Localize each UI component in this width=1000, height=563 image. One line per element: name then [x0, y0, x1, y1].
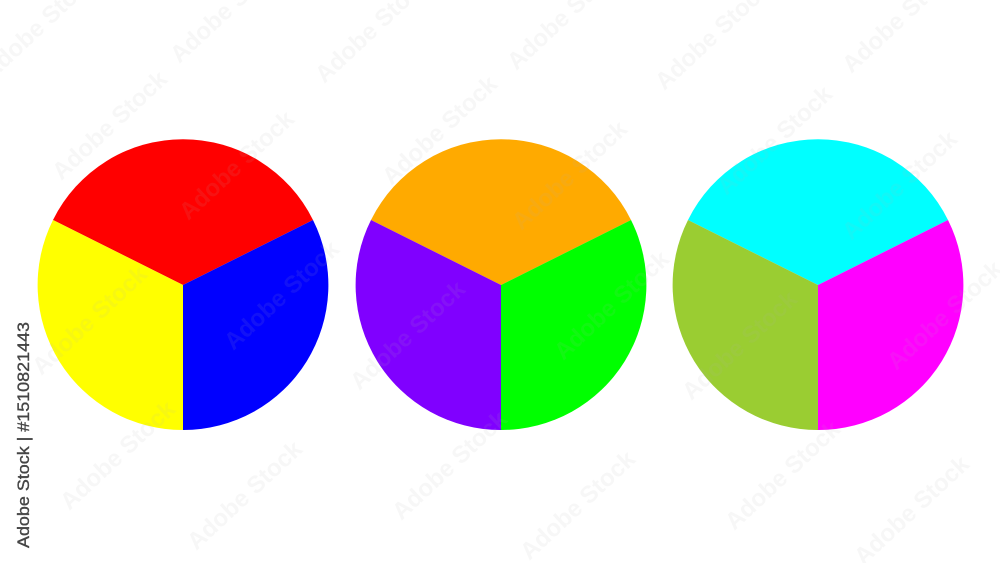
watermark pattern: Adobe Stock: [55, 395, 181, 515]
watermark pattern: Adobe Stock: [507, 115, 633, 235]
watermark pattern: Adobe Stock: [345, 275, 471, 395]
watermark pattern: Adobe Stock: [387, 405, 513, 525]
watermark pattern: Adobe Stock: [720, 415, 846, 535]
watermark pattern: Adobe Stock: [27, 260, 153, 380]
watermark pattern: Adobe Stock: [677, 285, 803, 405]
watermark pattern: Adobe Stock: [182, 435, 308, 555]
watermark pattern: Adobe Stock: [712, 80, 838, 200]
watermark pattern: Adobe Stock: [47, 65, 173, 185]
colour wheel: cyan, magenta, yellow-green: [673, 139, 963, 430]
watermark pattern: Adobe Stock: [377, 70, 503, 190]
colour wheel: red, blue, yellow: [38, 139, 328, 430]
watermark pattern: Adobe Stock: [515, 445, 641, 563]
watermark pattern: Adobe Stock: [549, 245, 675, 365]
watermark pattern: Adobe Stock: [174, 105, 300, 225]
watermark pattern: Adobe Stock: [219, 235, 345, 355]
watermark pattern: Adobe Stock: [837, 125, 963, 245]
colour wheel: orange, green, violet: [356, 139, 646, 430]
stock image credit: Adobe Stock | #1510821443: [14, 322, 33, 548]
